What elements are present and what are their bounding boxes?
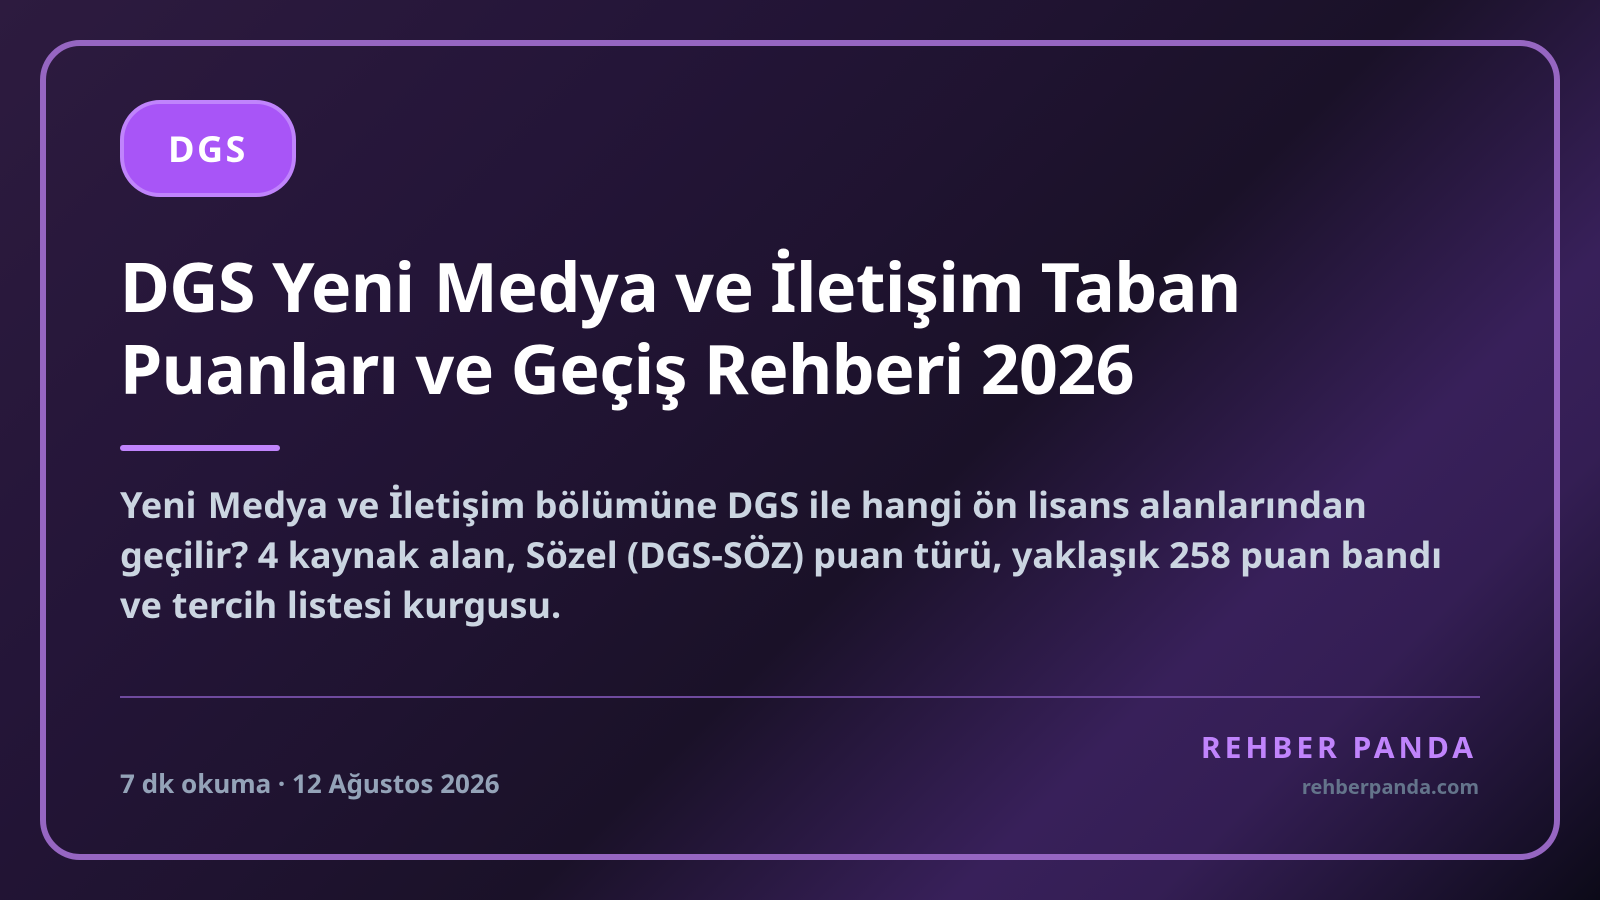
- description: geçilir? 4 kaynak alan, Sözel (DGS-SÖZ) puan türü, yaklaşık 258 puan bandı: [120, 530, 1442, 579]
- accent bar: [120, 445, 280, 451]
- brand name: REHBER PANDA: [1201, 726, 1477, 767]
- title: Puanları ve Geçiş Rehberi 2026: [120, 321, 1134, 414]
- description: ve tercih listesi kurgusu.: [120, 580, 561, 629]
- brand website: rehberpanda.com: [1302, 773, 1479, 800]
- reading time and date: 7 dk okuma · 12 Ağustos 2026: [120, 765, 500, 801]
- description: [120, 480, 1442, 629]
- footer divider: [120, 696, 1480, 698]
- category badge: [120, 100, 296, 197]
- category badge: DGS: [168, 124, 248, 173]
- title: DGS Yeni Medya ve İletişim Taban: [120, 239, 1241, 332]
- description: Yeni Medya ve İletişim bölümüne DGS ile hangi ön lisans alanlarından: [120, 480, 1367, 529]
- title: [120, 239, 1241, 414]
